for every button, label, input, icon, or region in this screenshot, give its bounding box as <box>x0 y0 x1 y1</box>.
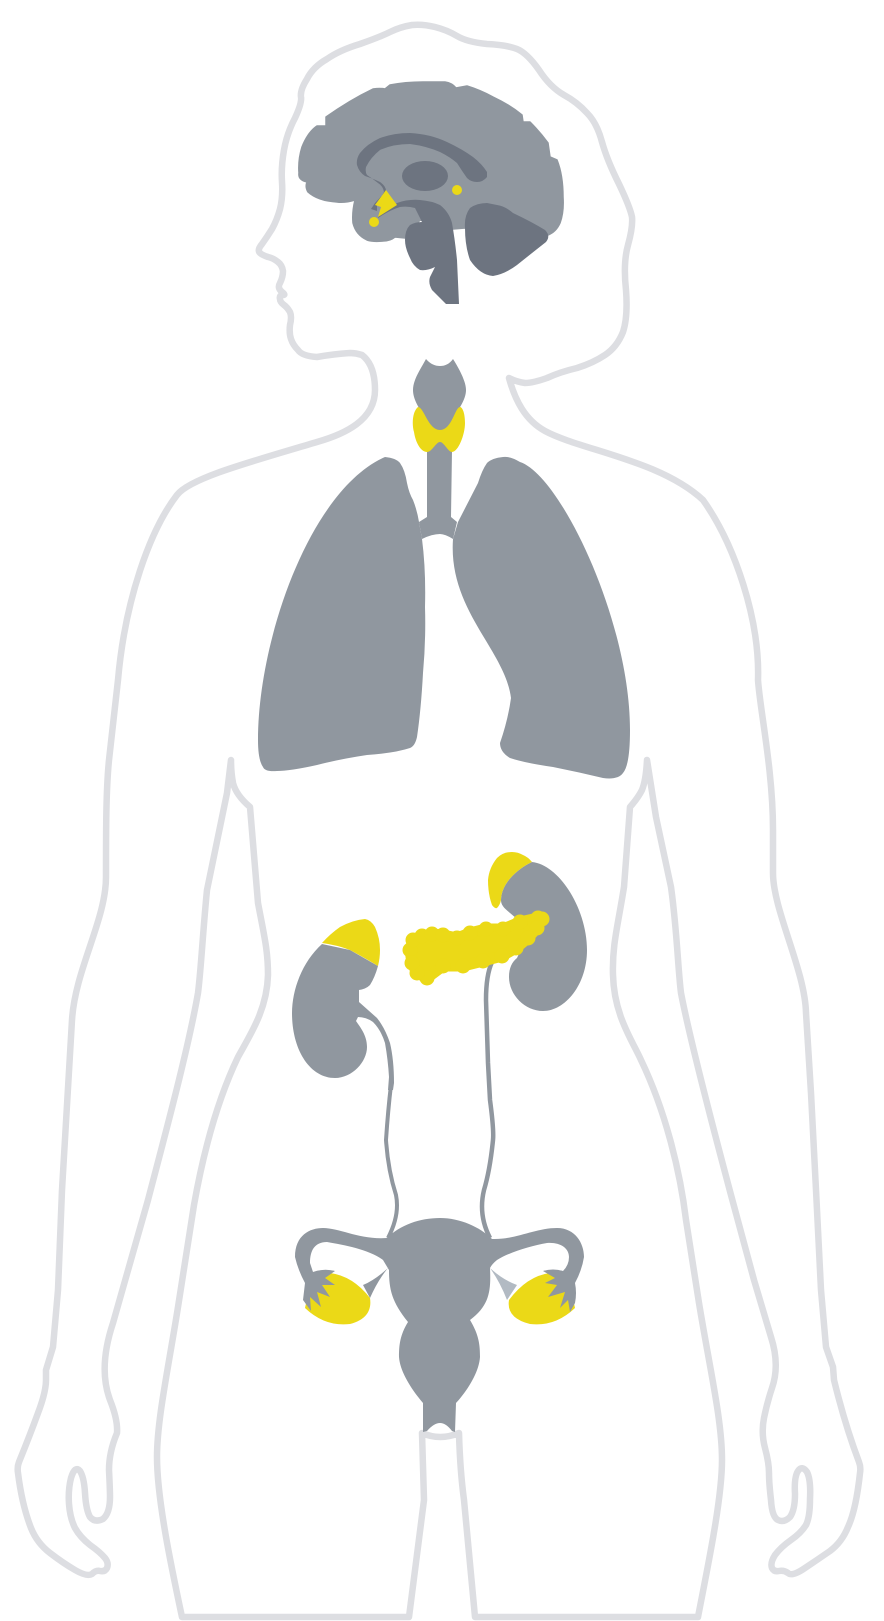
right ovary <box>509 1273 575 1324</box>
uterus, fallopian tubes and vagina <box>295 1218 584 1432</box>
left ligament <box>363 1268 388 1298</box>
pineal gland <box>452 185 462 195</box>
pituitary gland <box>375 190 397 217</box>
pancreas <box>402 910 550 986</box>
left ovary <box>305 1273 370 1324</box>
thalamus <box>402 161 448 191</box>
left-side kidney and ureter top <box>292 944 394 1090</box>
brainstem <box>378 200 459 304</box>
cerebellum <box>465 203 548 276</box>
corpus callosum <box>357 133 487 211</box>
right ureter <box>482 962 493 1238</box>
right-side adrenal gland <box>488 852 532 908</box>
left lung <box>258 457 425 771</box>
right lung <box>453 457 630 778</box>
thyroid gland <box>413 407 465 452</box>
pituitary dot <box>369 217 379 227</box>
brain <box>299 82 563 304</box>
cerebrum <box>299 82 563 241</box>
right-side kidney <box>501 862 587 1011</box>
left-side adrenal gland <box>322 919 380 966</box>
larynx and trachea <box>413 359 466 539</box>
left ureter <box>386 1085 397 1238</box>
right ligament <box>490 1268 517 1300</box>
